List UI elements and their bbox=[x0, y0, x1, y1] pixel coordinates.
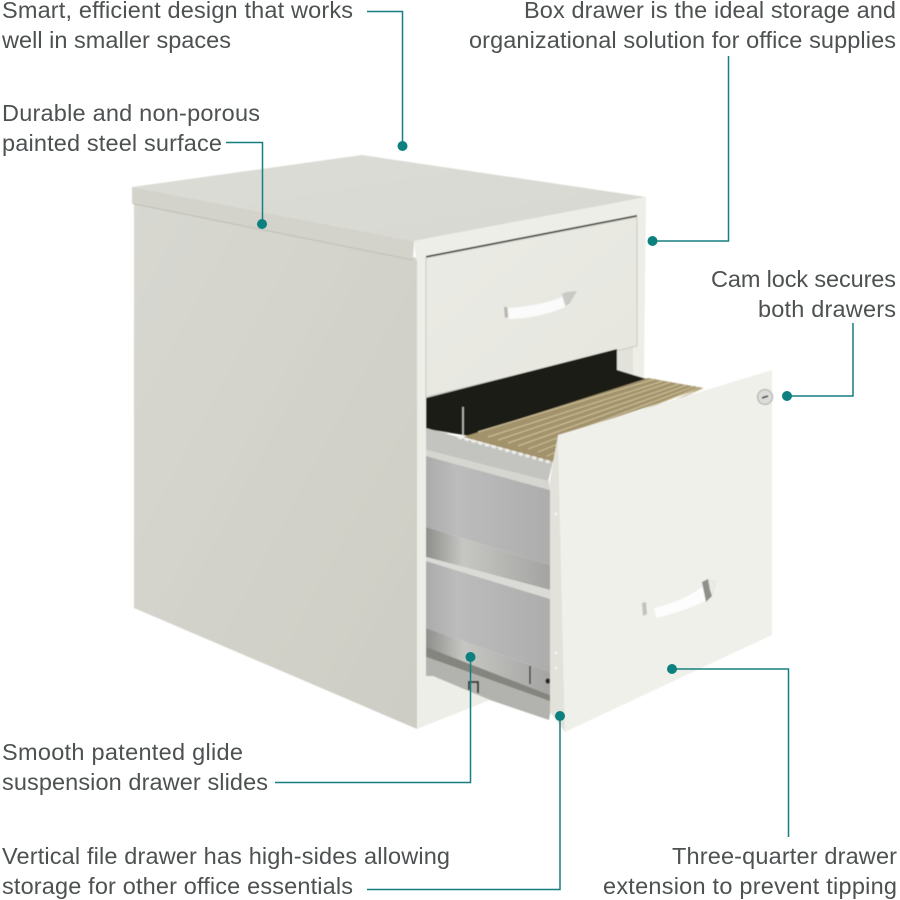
upper metal panel bbox=[426, 456, 550, 565]
callout: vertical file drawer: Vertical file drawer has high-sides allowing bbox=[2, 843, 450, 869]
cam lock bbox=[758, 390, 772, 404]
upper drawer handle bbox=[504, 291, 577, 319]
drawer dark interior bbox=[426, 349, 650, 436]
open drawer front bbox=[558, 370, 772, 732]
drawer gap bbox=[426, 215, 637, 258]
drawer inner side wall with comb tabs bbox=[426, 428, 553, 481]
top lip bbox=[132, 187, 414, 260]
callout: box drawer bbox=[469, 0, 896, 246]
callout: smart efficient design bbox=[1, 0, 408, 151]
open drawer side flange bbox=[550, 435, 565, 732]
drawer hanger post bbox=[462, 407, 464, 436]
callout: smart efficient design: well in smaller spaces bbox=[1, 27, 231, 53]
callout: cam lock bbox=[711, 266, 896, 401]
callout: vertical file drawer bbox=[2, 711, 565, 899]
callout: cam lock: Cam lock secures bbox=[711, 266, 896, 292]
callout: painted steel surface: Durable and non-porous bbox=[2, 100, 260, 126]
callout: cam lock: both drawers bbox=[758, 296, 896, 322]
drawer slide bbox=[426, 628, 552, 720]
cabinet top bbox=[132, 155, 646, 241]
cabinet left post and foot bbox=[417, 256, 490, 729]
cabinet side panel bbox=[134, 204, 417, 729]
cavity behind open drawer bbox=[426, 340, 633, 440]
callout: glide suspension bbox=[2, 652, 476, 795]
drawer rail bbox=[426, 527, 550, 590]
callout: three-quarter extension: Three-quarter drawer bbox=[672, 843, 897, 869]
callout: glide suspension: suspension drawer slides bbox=[2, 769, 268, 795]
callout: painted steel surface bbox=[2, 100, 267, 229]
lower metal panel bbox=[426, 561, 550, 672]
callout: three-quarter extension: extension to prevent tipping bbox=[603, 873, 897, 899]
callout: glide suspension: Smooth patented glide bbox=[2, 739, 243, 765]
callout: painted steel surface: painted steel surface bbox=[2, 130, 222, 156]
lower drawer handle bbox=[642, 579, 716, 618]
hanging files bbox=[463, 378, 703, 462]
callout: box drawer: organizational solution for office supplies bbox=[469, 27, 896, 53]
callout: vertical file drawer: storage for other office essentials bbox=[2, 873, 353, 899]
filing cabinet illustration bbox=[132, 155, 772, 732]
cabinet right post bbox=[630, 197, 646, 378]
callout: three-quarter extension bbox=[603, 664, 897, 899]
upper drawer bbox=[426, 217, 637, 397]
